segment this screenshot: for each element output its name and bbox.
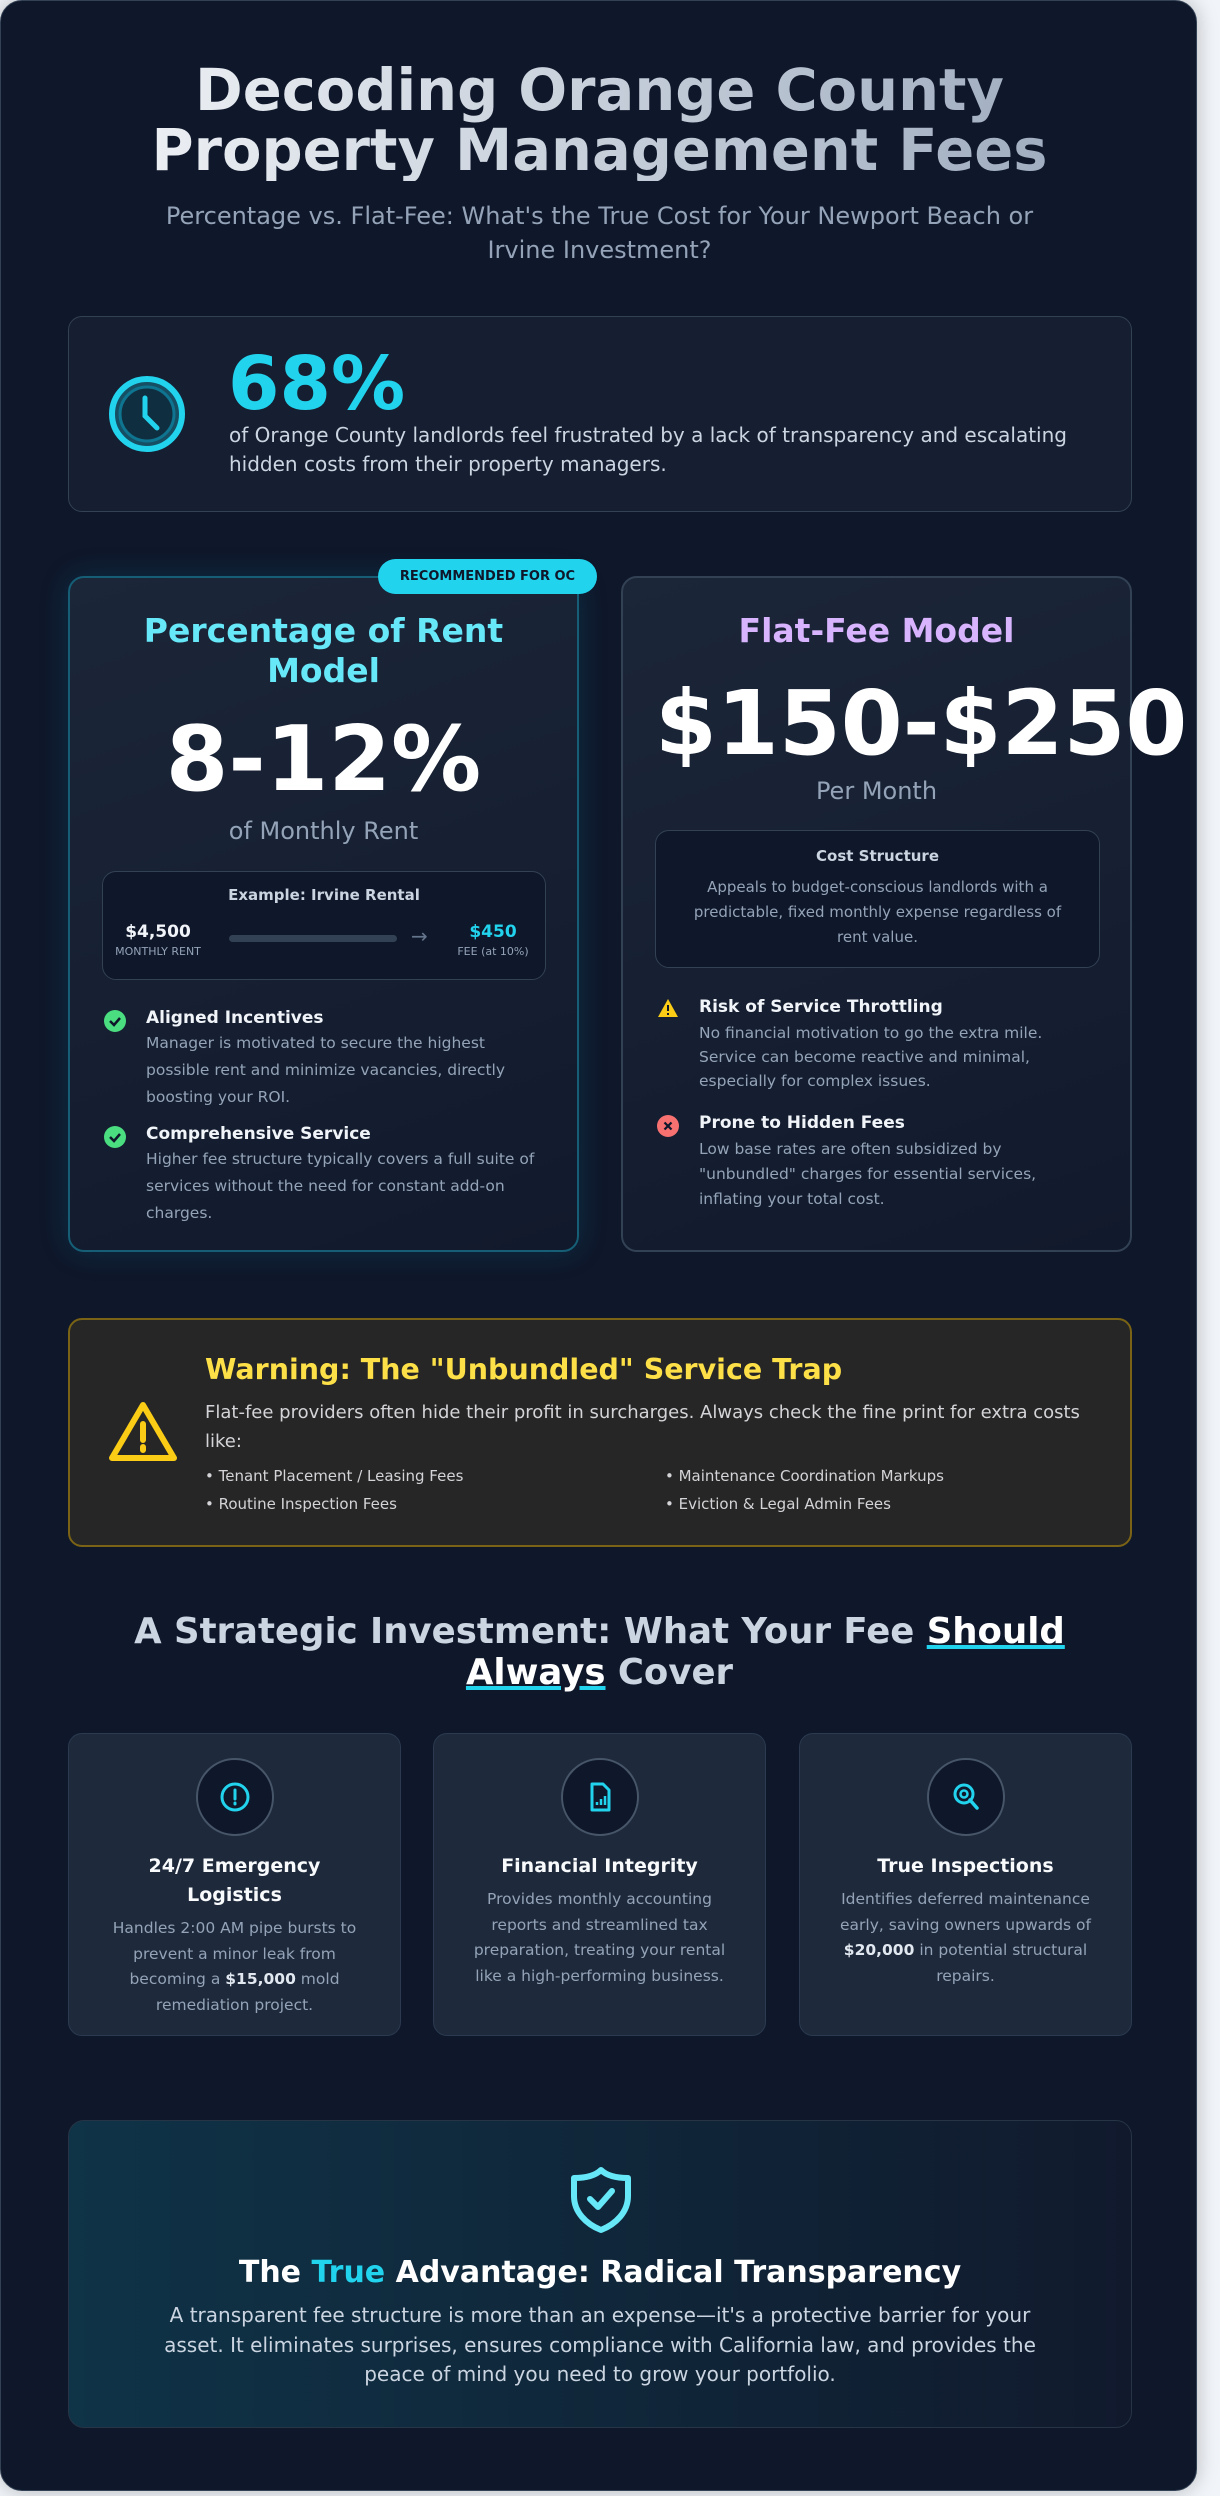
panel: warning: • Tenant Placement / Leasing Fees (205, 1467, 463, 1485)
feature: aligned incentives: Aligned Incentives (146, 1008, 324, 1028)
card: inspections (799, 1733, 1132, 2036)
heading: Percentage of Rent (144, 611, 503, 650)
badge: RECOMMENDED FOR OC (400, 569, 575, 584)
feature: aligned incentives (104, 1008, 505, 1106)
icon: warning triangle (109, 1402, 177, 1461)
big number: 8-12% (166, 707, 481, 812)
card: financial: Financial Integrity (501, 1855, 698, 1877)
feature: comprehensive service: Higher fee structure typically covers a full suite of services without the need for constant add-on charges. (146, 1150, 534, 1222)
card: emergency: Logistics (187, 1884, 282, 1906)
panel: transparency (68, 2120, 1132, 2428)
icon: alert circle (196, 1758, 274, 1836)
example box: Example: Irvine Rental (228, 886, 420, 904)
icon: shield (571, 2167, 631, 2233)
example box: → (411, 924, 428, 948)
card: emergency (68, 1733, 401, 2036)
example box: FEE (at 10%) (457, 945, 529, 958)
feature: hidden fees (657, 1113, 1036, 1208)
cost structure box: Cost Structure (816, 847, 939, 865)
panel: flat-fee model (621, 576, 1132, 1252)
icon: clock (109, 376, 185, 452)
feature: aligned incentives: Manager is motivated to secure the highest possible rent and minimize vacancies, directly boosting your ROI. (146, 1034, 505, 1106)
title: Decoding Orange County (195, 57, 1004, 124)
panel: warning: • Routine Inspection Fees (205, 1495, 397, 1513)
big number: $150-$250 (655, 671, 1187, 775)
panel: percentage model (68, 576, 579, 1252)
panel: warning: • Maintenance Coordination Markups (665, 1467, 944, 1485)
card: emergency: 24/7 Emergency (149, 1855, 320, 1877)
panel: warning (68, 1318, 1132, 1547)
card: emergency: Handles 2:00 AM pipe bursts to prevent a minor leak from becoming a $15,000 mold remediation project. (113, 1919, 356, 2014)
subtitle: Percentage vs. Flat-Fee: What's the True Cost for Your Newport Beach or Irvine Investment? (166, 202, 1033, 264)
warning text: Flat-fee providers often hide their profit in surcharges. Always check the fine print for extra costs like: (205, 1402, 1080, 1452)
example box: $4,500 (125, 922, 191, 942)
cost structure box: Appeals to budget-conscious landlords with a predictable, fixed monthly expense regardless of rent value. (694, 878, 1061, 946)
feature: service throttling: No financial motivation to go the extra mile. Service can become reactive and minimal, especially for complex issues. (699, 1024, 1042, 1090)
feature: hidden fees: Prone to Hidden Fees (699, 1113, 905, 1133)
card: financial (433, 1733, 766, 2036)
bullet list (205, 1467, 944, 1513)
feature: hidden fees: Low base rates are often subsidized by "unbundled" charges for essential services, inflating your total cost. (699, 1140, 1036, 1208)
panel: warning: • Eviction & Legal Admin Fees (665, 1495, 891, 1513)
example box: MONTHLY RENT (115, 945, 201, 958)
body text: A transparent fee structure is more than an expense—it's a protective barrier for your asset. It eliminates surprises, ensures compliance with California law, and provides the peace of mind you need to grow your portfolio. (164, 2303, 1036, 2386)
example box: $450 (469, 922, 517, 942)
heading: Model (267, 651, 380, 690)
feature: comprehensive service (104, 1124, 535, 1222)
stat text: of Orange County landlords feel frustrated by a lack of transparency and escalating hidden costs from their property managers. (229, 423, 1067, 476)
sub label: of Monthly Rent (229, 817, 418, 845)
panel: stat (68, 316, 1132, 512)
title: Property Management Fees (152, 117, 1047, 184)
icon: magnifier (926, 1758, 1004, 1836)
title (1, 61, 1198, 181)
icon: document chart (560, 1758, 638, 1836)
card: inspections: Identifies deferred maintenance early, saving owners upwards of $20,000 in potential structural repairs. (840, 1890, 1091, 1984)
stat number: 68% (228, 341, 405, 427)
heading (144, 611, 503, 690)
badge (378, 559, 597, 594)
feature: service throttling (658, 997, 1042, 1090)
section heading: A Strategic Investment: What Your Fee Should Always Cover (134, 1611, 1065, 1693)
card: financial: Provides monthly accounting reports and streamlined tax preparation, treating your rental like a high-performing business. (474, 1890, 725, 1984)
card: inspections: True Inspections (877, 1855, 1054, 1877)
heading: Flat-Fee Model (739, 611, 1014, 650)
feature: comprehensive service: Comprehensive Service (146, 1124, 371, 1144)
example box (102, 871, 546, 980)
cost structure box (655, 830, 1100, 968)
heading: The True Advantage: Radical Transparency (239, 2255, 961, 2290)
warning heading: Warning: The "Unbundled" Service Trap (205, 1353, 842, 1386)
sub label: Per Month (816, 777, 937, 805)
feature: service throttling: Risk of Service Throttling (699, 997, 943, 1017)
